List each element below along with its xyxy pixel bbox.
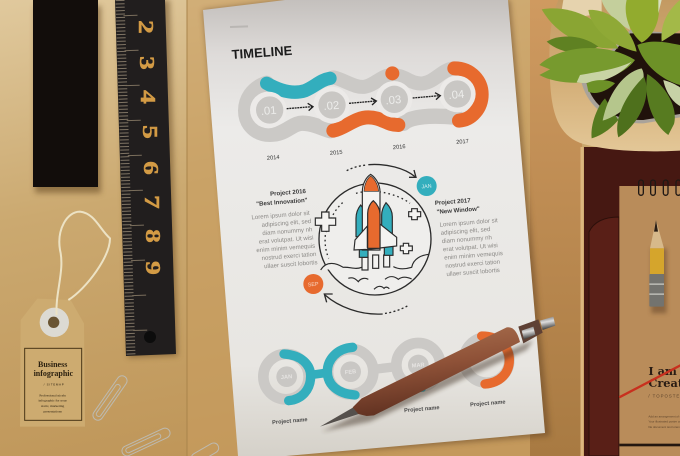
paper clips: [91, 374, 220, 456]
month MAR: [408, 355, 429, 375]
step 03: .03: [385, 94, 402, 107]
title: TIMELINE: [231, 43, 293, 62]
ruler numbers: 4: [136, 90, 159, 104]
project name labels: Project name: [470, 399, 506, 409]
dark wood panel: [580, 147, 680, 456]
step 03: [381, 86, 408, 113]
JAN badge: [417, 176, 437, 196]
nozzles: [362, 255, 390, 270]
pen shadow: [322, 340, 533, 432]
ruler long ticks: [130, 0, 141, 356]
pot: [549, 0, 680, 151]
teal connected arcs: [284, 347, 423, 401]
year labels: 2017: [456, 139, 469, 146]
tag label box: [25, 348, 82, 420]
step 01: [256, 96, 283, 124]
year labels: [267, 139, 469, 162]
pen end: [540, 317, 555, 330]
rocket nose: [364, 176, 379, 191]
pen body: [353, 327, 520, 416]
lower teal tanks: [359, 246, 393, 257]
project 2017 body: [439, 217, 505, 278]
black block: [33, 0, 101, 193]
plus signs: [315, 209, 421, 254]
header mark: [230, 25, 248, 28]
step 04: .04: [448, 89, 465, 102]
leaves: [539, 0, 680, 138]
project name labels: Project name: [404, 405, 440, 414]
project 2017 heading: "New Window": [436, 206, 480, 216]
ruler numbers: 7: [140, 195, 163, 209]
year labels: 2015: [330, 150, 343, 157]
month FEB: FEB: [345, 369, 356, 376]
clouds: [321, 254, 429, 270]
notebook red line: [619, 365, 680, 397]
price tag: [20, 212, 110, 427]
pen clamp: [518, 319, 543, 343]
top cycle arrow: [347, 164, 416, 177]
orange arc: [454, 68, 482, 121]
connector bars: [373, 367, 397, 369]
ruler numbers: 5: [138, 125, 161, 139]
wings: [354, 224, 397, 250]
project 2017 heading: Project 2017: [435, 197, 472, 207]
mechanical pen: [320, 317, 555, 432]
ruler numbers: 2: [134, 20, 157, 34]
project 2016 heading: "Best Innovation": [256, 197, 308, 208]
JAN badge: JAN: [421, 184, 432, 190]
project 2017 body: ullaer suscit lobortis: [446, 267, 500, 278]
project 2016 heading: Project 2016: [270, 188, 307, 198]
ruler: [115, 0, 178, 358]
clip two: [120, 426, 172, 456]
project 2016 body: ullaer suscit lobortis: [264, 259, 318, 270]
SEP badge: [303, 274, 323, 294]
project 2017 body: diam nonummy nh: [442, 234, 492, 245]
arrows between steps: [287, 93, 440, 111]
timeline chart: [246, 66, 482, 162]
clip one: [91, 374, 129, 422]
clip three: [190, 441, 220, 456]
SEP badge: SEP: [308, 282, 319, 288]
tag string: [56, 212, 110, 315]
pot soil: [582, 30, 680, 123]
inner dotted arcs: [325, 191, 410, 258]
step 01: .01: [260, 105, 277, 118]
project 2017 body: nostrud exerci tation: [445, 259, 500, 270]
orange dot: [385, 66, 399, 80]
pen tip: [320, 407, 359, 427]
bottom month chart: [263, 336, 509, 426]
year labels: 2014: [267, 155, 280, 162]
plant pot and leaves: [539, 0, 680, 151]
text block: project 2016: [250, 188, 318, 271]
ruler screw: [144, 331, 156, 343]
step 04: [444, 80, 471, 108]
project 2016 body: [251, 209, 318, 271]
tag text: static, marketing: [41, 404, 65, 409]
rocket body: [362, 174, 380, 250]
project 2016 body: nostrud exerci tation: [261, 251, 317, 262]
ruler numbers: 8: [141, 229, 164, 243]
project 2016 heading: [255, 188, 308, 208]
paper sheet: [203, 0, 550, 456]
orange arc: [482, 336, 509, 384]
project 2017 heading: [435, 197, 480, 216]
step 02: [318, 91, 346, 119]
tag text: presentations: [43, 410, 62, 414]
project name labels: [272, 399, 506, 426]
project 2017 body: erat volutpat. Ut wisi: [443, 242, 498, 253]
month JAN: JAN: [281, 374, 292, 381]
month FEB: [340, 361, 361, 382]
step halos: [250, 76, 476, 128]
bottom cycle arrow: [324, 294, 407, 314]
project 2017 body: enim minim vemequis: [444, 250, 503, 262]
project 2017 body: Lorem ipsum dolor sit: [439, 217, 498, 229]
orange bottom wave: [333, 117, 398, 131]
project 2016 body: diam nonummy nh: [262, 226, 313, 237]
notebook text: I am: [648, 364, 677, 378]
ruler numbers: [134, 20, 164, 275]
tag text: Business: [38, 360, 67, 369]
month JAN: [276, 366, 297, 387]
tag text: infographic for your: [39, 398, 68, 402]
step 02: .02: [323, 100, 340, 113]
text block: project 2017: [435, 195, 505, 279]
teal wave: [267, 78, 330, 92]
ruler numbers: 9: [141, 261, 164, 275]
tag text: infographic: [34, 369, 74, 378]
wood groove: [589, 217, 619, 456]
project 2016 body: Lorem ipsum dolor sit: [251, 210, 310, 221]
pencil: [649, 220, 667, 313]
center tank: [368, 201, 380, 248]
year labels: 2016: [393, 144, 406, 151]
project 2016 body: erat volutpat. Ut wisi: [259, 234, 314, 246]
notebook spirals: [639, 180, 680, 195]
ruler ticks: [120, 0, 131, 356]
tag eyelet: [40, 308, 69, 337]
project 2017 body: adipiscing elit, sed: [440, 226, 491, 237]
side boosters: [356, 205, 366, 237]
rocket illustration: [303, 164, 437, 314]
tag text: / SITEMAP: [44, 382, 64, 386]
project 2016 body: enim minim vemequis: [256, 243, 315, 254]
project 2016 body: adipiscing elit, sed: [261, 218, 312, 229]
notebook: [619, 180, 680, 456]
ruler numbers: 3: [135, 56, 158, 70]
month MAR: MAR: [412, 362, 425, 370]
ruler numbers: 6: [139, 161, 162, 175]
gray rings: [263, 337, 509, 399]
project name labels: Project name: [272, 417, 308, 426]
gray band: [246, 68, 457, 134]
notebook text: [648, 364, 680, 429]
main circle: [319, 183, 431, 295]
tag text: Professional nicely: [39, 393, 66, 397]
tag text: [34, 360, 74, 414]
